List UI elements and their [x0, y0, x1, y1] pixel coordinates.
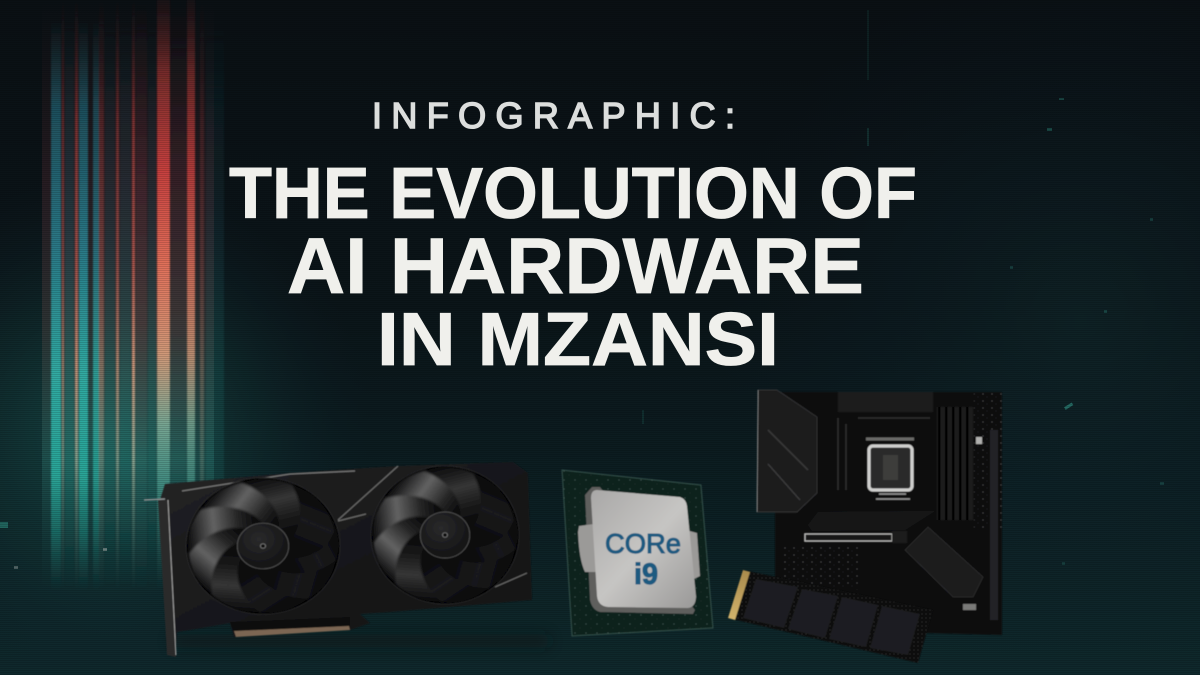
- floor shadow: [170, 634, 550, 648]
- CPU substrate: [562, 470, 713, 636]
- CPU label: CORe: CORe: [605, 528, 681, 559]
- IO shroud: [757, 390, 817, 512]
- left fan: [169, 461, 357, 626]
- vertical light stripes: [42, 0, 224, 590]
- GPU bracket: [144, 471, 355, 657]
- CPU lid underlayer: [585, 487, 695, 614]
- chipset heatsink: [905, 527, 983, 597]
- icon: NVMe solid state drive: [728, 570, 933, 663]
- CPU heat spreader: [591, 490, 696, 608]
- lower shroud: [808, 511, 935, 531]
- icon: graphics card: [144, 449, 536, 657]
- SSD board: [728, 570, 933, 663]
- board: [775, 392, 1002, 635]
- board edge parts: [963, 430, 998, 620]
- CPU socket: [866, 439, 914, 499]
- GPU edge connector: [230, 617, 350, 637]
- icon: Core i9 processor: [562, 470, 713, 636]
- icon: motherboard: [757, 390, 1002, 635]
- heading line 3: IN MZANSI: [377, 297, 779, 381]
- heading line 2: AI HARDWARE: [287, 221, 864, 310]
- right fan: [354, 449, 536, 616]
- GPU shroud: [160, 462, 532, 657]
- PCIe slot: [805, 531, 907, 543]
- VRM channels: [838, 418, 930, 490]
- shroud highlights: [338, 466, 527, 587]
- heading line 1: THE EVOLUTION OF: [229, 154, 917, 234]
- SSD memory chips: [743, 579, 920, 655]
- CPU lid tabs: [578, 524, 700, 580]
- title block: [229, 95, 917, 381]
- eyebrow: INFOGRAPHIC:: INFOGRAPHIC:: [372, 95, 735, 136]
- board speckle: [782, 392, 1002, 590]
- SSD gold connector: [728, 570, 750, 620]
- RAM heatsink: [937, 407, 973, 520]
- top VRM cover: [838, 392, 933, 412]
- CPU label: [605, 528, 681, 591]
- CPU label: i9: i9: [634, 558, 658, 591]
